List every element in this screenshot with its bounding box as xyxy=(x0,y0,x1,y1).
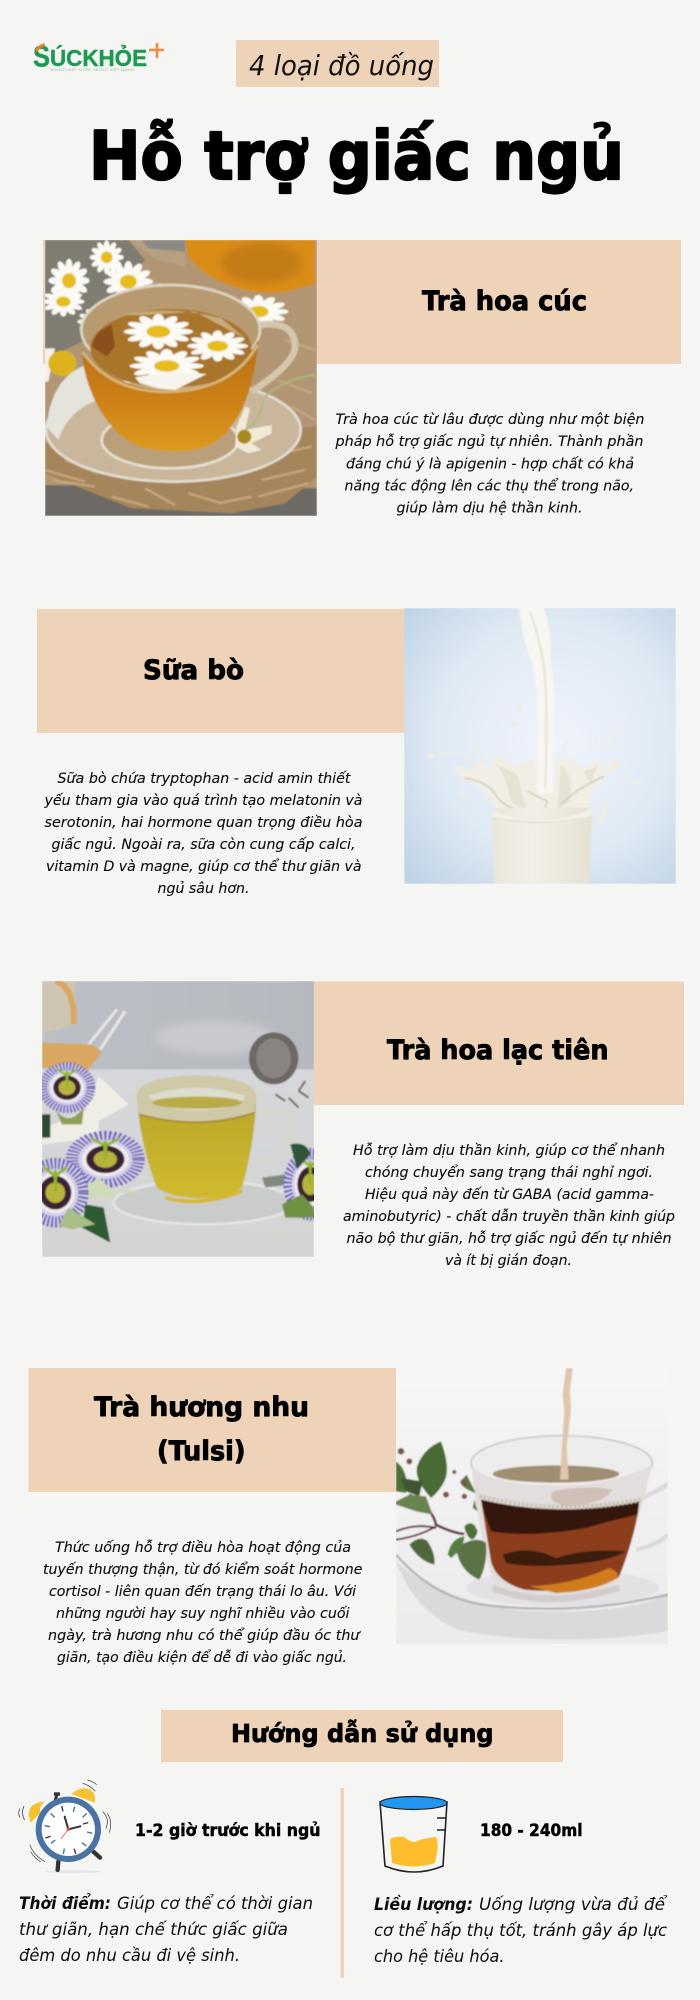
text: dosage: Uống lượng vừa đủ để xyxy=(479,1894,668,1915)
text: tulsi: cortisol - liên quan đến trạng thái lo âu. Với xyxy=(49,1583,356,1600)
text: passionflower: Hỗ trợ làm dịu thần kinh, giúp cơ thể nhanh xyxy=(353,1142,665,1159)
text: tulsi: những người hay suy nghĩ nhiều vào cuối xyxy=(56,1605,350,1622)
icon: measuring glass xyxy=(380,1796,447,1872)
text: milk: Sữa bò chứa tryptophan - acid amin thiết xyxy=(58,770,352,787)
text: passionflower: chóng chuyển sang trạng thái nghỉ ngơi. xyxy=(365,1164,653,1181)
panel: cow milk xyxy=(37,608,676,897)
text: chamomile: Trà hoa cúc từ lâu được dùng như một biện xyxy=(336,412,644,428)
text: chamomile: giúp làm dịu hệ thần kinh. xyxy=(396,500,582,516)
text: chamomile: pháp hỗ trợ giấc ngủ tự nhiên. Thành phần xyxy=(335,433,644,450)
text: chamomile: đáng chú ý là apigenin - hợp chất có khả xyxy=(346,456,634,472)
text: chamomile xyxy=(335,412,644,516)
text: milk: serotonin, hai hormone quan trọng điều hòa xyxy=(44,814,362,831)
text: tulsi: giãn, tạo điều kiện để dễ đi vào giấc ngủ. xyxy=(57,1649,347,1666)
text: passionflower: và ít bị gián đoạn. xyxy=(445,1253,572,1269)
vertical divider xyxy=(340,1788,344,1978)
text: chamomile: năng tác động lên các thụ thể trong não, xyxy=(344,478,634,494)
text: milk: giấc ngủ. Ngoài ra, sữa còn cung cấp calci, xyxy=(52,837,356,853)
text: tulsi: Thức uống hỗ trợ điều hòa hoạt động của xyxy=(55,1539,351,1556)
panel: tulsi tea xyxy=(28,1368,668,1666)
text: timing: đêm do nhu cầu đi vệ sinh. xyxy=(19,1945,240,1966)
subtitle tag: 4 loại đồ uống xyxy=(249,49,434,82)
heading band: chamomile: Trà hoa cúc xyxy=(422,286,587,317)
heading band: chamomile xyxy=(43,240,681,364)
text: tulsi: ngày, trà hương nhu có thể giúp đầu óc thư xyxy=(48,1627,361,1644)
text: dosage: Liều lượng: xyxy=(374,1894,473,1915)
text: dosage xyxy=(374,1894,668,1967)
logo: Sức Khỏe+: ÚCKHỎE xyxy=(50,43,147,71)
text: milk: ngủ sâu hơn. xyxy=(158,881,250,897)
photo: milk splash xyxy=(404,608,676,884)
text: tulsi xyxy=(43,1539,363,1666)
heading band: tulsi xyxy=(28,1368,396,1492)
heading band: milk: Sữa bò xyxy=(143,655,244,686)
text: passionflower xyxy=(343,1142,675,1269)
photo: tulsi tea xyxy=(396,1368,668,1644)
text: timing: Thời điểm: xyxy=(19,1892,111,1914)
photo: passionflower tea xyxy=(42,981,314,1257)
icon: alarm clock xyxy=(19,1780,111,1873)
section heading: usage guide xyxy=(161,1710,563,1762)
text: passionflower: Hiệu quả này đến từ GABA (acid gamma- xyxy=(365,1186,654,1203)
main title: Hỗ trợ giấc ngủ xyxy=(89,117,624,195)
text: milk: yếu tham gia vào quá trình tạo melatonin và xyxy=(44,792,362,809)
text: timing: Giúp cơ thể có thời gian xyxy=(117,1893,313,1914)
heading band: passionflower: Trà hoa lạc tiên xyxy=(387,1035,608,1066)
text: timing: thư giãn, hạn chế thức giấc giữa xyxy=(19,1919,288,1940)
heading band: tulsi: (Tulsi) xyxy=(157,1436,246,1467)
text: timing xyxy=(19,1892,313,1966)
text: dosage: cho hệ tiêu hóa. xyxy=(374,1947,504,1967)
heading band: passionflower xyxy=(313,982,684,1105)
text: milk: vitamin D và magne, giúp cơ thể thư giãn và xyxy=(46,858,362,875)
heading band: tulsi: Trà hương nhu xyxy=(94,1392,309,1423)
logo: Sức Khỏe+ xyxy=(33,40,164,74)
panel: chamomile tea xyxy=(42,240,681,516)
label: timing: 1-2 giờ trước khi ngủ xyxy=(135,1821,320,1841)
panel: passionflower tea xyxy=(23,981,684,1269)
text: passionflower: aminobutyric) - chất dẫn truyền thần kinh giúp xyxy=(343,1208,675,1225)
subtitle tag xyxy=(236,40,439,87)
text: tulsi: tuyến thượng thận, từ đó kiểm soát hormone xyxy=(43,1561,363,1578)
label: dosage amount: 180 - 240ml xyxy=(480,1821,582,1841)
heading band: milk xyxy=(37,609,405,733)
photo: chamomile tea xyxy=(42,240,317,516)
section heading: usage guide: Hướng dẫn sử dụng xyxy=(231,1719,494,1748)
text: milk xyxy=(44,770,362,897)
text: dosage: cơ thể hấp thụ tốt, tránh gây áp lực xyxy=(374,1920,668,1941)
text: passionflower: não bộ thư giãn, hỗ trợ giấc ngủ đến tự nhiên xyxy=(346,1230,672,1247)
logo: Sức Khỏe+: S xyxy=(33,40,50,74)
logo: Sức Khỏe+: NGƯỜI VIỆT KHỎE, NƯỚC VIỆT MẠNH xyxy=(50,67,134,72)
